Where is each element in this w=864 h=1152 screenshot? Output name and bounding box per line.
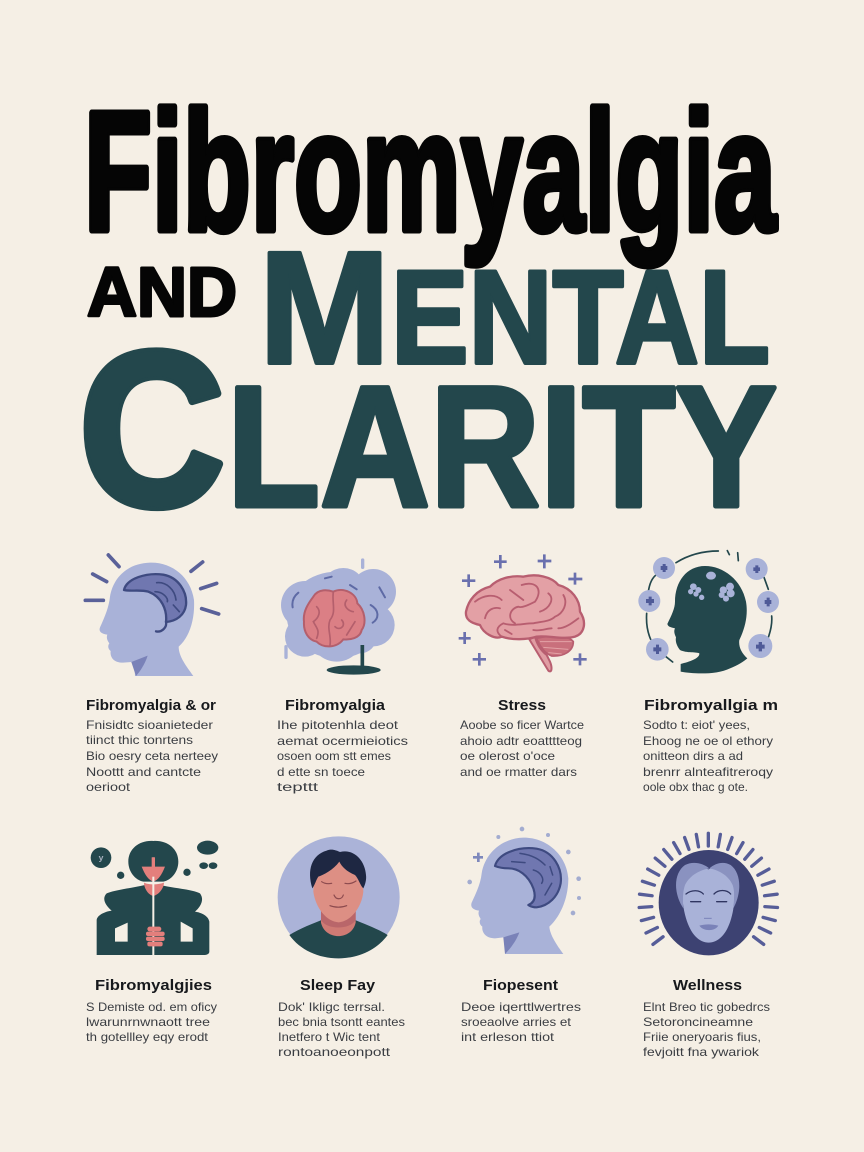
panel: row 2 column 4 [639,833,777,1059]
body text: Ehoog ne oe ol ethory [643,734,773,748]
body text: d ette sn toece [277,765,365,779]
panel: row 1 column 4 [638,551,779,794]
body text: th gotellley eqy erodt [86,1030,209,1044]
body text: onitteon dirs a ad [643,749,743,763]
title word: Mental: ENTAL [391,244,770,392]
body text: Sodto t: eiot' yees, [643,718,750,732]
heading: Wellness [673,978,742,994]
body text: oerioot [86,780,131,794]
panel: row 1 column 2 [277,560,408,794]
heading: Fibromyallgia m [644,698,778,714]
title word: AND: AND [87,253,237,331]
heading: Stress [498,698,546,714]
body text: brenrr alnteafitreroqy [643,765,773,779]
body text [643,1000,770,1059]
body text: sroeaolve arries et [461,1015,572,1029]
icon: head with brain and rays [85,555,219,676]
icon: brain in cloud on stand [281,560,396,675]
icon: head with brain and dots [467,827,581,954]
heading: Fibromyalgia & or [86,698,216,714]
body text [460,718,584,779]
body text: lwarunrnwnaott tree [86,1015,210,1029]
body text: and oe rmatter dars [460,765,577,779]
panel: row 2 column 2 [278,836,405,1059]
body text: Noottt and cantcte [86,765,201,779]
body text: S Demiste od. em oficy [86,1000,217,1014]
body text: Aoobe so ficer Wartce [460,718,584,732]
body text: Ihe pitotenhla deot [277,718,399,732]
panel: row 2 column 3 [461,827,581,1044]
heading: Fiopesent [483,978,558,994]
icon: figure holding a staff: y [99,853,104,863]
body text: oe olerost o'oce [460,749,555,763]
title word: Clarity [79,306,777,552]
body text [461,1000,581,1044]
body text [643,718,773,794]
heading: Fibromyalgia [285,698,386,714]
title word: Clarity: C [79,306,225,552]
body text: aemat ocermieiotics [277,734,408,748]
heading: Sleep Fay [300,978,375,994]
icon: man portrait in circle [278,836,400,958]
icon: dark head with orbiting circles [638,551,779,673]
body text: osoen oom stt emes [277,749,391,763]
icon: pink brain with plus signs [459,554,587,671]
body text: fevjoitt fna ywariok [643,1045,760,1059]
body text: int erleson ttiot [461,1030,555,1044]
body text: Bio oesry ceta nerteey [86,749,218,763]
panel: row 2 column 1 [86,841,218,1044]
body text: Friie oneryoaris fius, [643,1030,761,1044]
body text [278,1000,405,1059]
title word: Mental: M [259,218,390,397]
body text [277,718,408,794]
title word: Clarity: LARITY [227,351,777,543]
body text: Inetfero t Wic tent [278,1030,381,1044]
body text: Fnisidtc sioanieteder [86,718,213,732]
body text: Dok' Ikligc terrsal. [278,1000,385,1014]
title word: Mental [259,218,770,397]
heading: Fibromyalgjies [95,978,212,994]
body text: ahoio adtr eoatttteog [460,734,582,748]
icon: glowing face in dark circle [639,833,777,955]
panel: row 1 column 3 [459,554,587,779]
body text: tiinct thic tonrtens [86,733,193,747]
body text: Setoroncineamne [643,1015,753,1029]
body text: tepttt [277,780,319,794]
panel: row 1 column 1 [85,555,219,794]
title [79,77,777,552]
body text [86,718,218,794]
body text: oole obx thac g ote. [643,780,748,794]
body text: Deoe iqerttlwertres [461,1000,581,1014]
icon: figure holding a staff [91,841,218,955]
body text: Elnt Breo tic gobedrcs [643,1000,770,1014]
body text: rontoanoeonpott [278,1045,391,1059]
body text [86,1000,217,1044]
body text: bec bnia tsontt eantes [278,1015,405,1029]
